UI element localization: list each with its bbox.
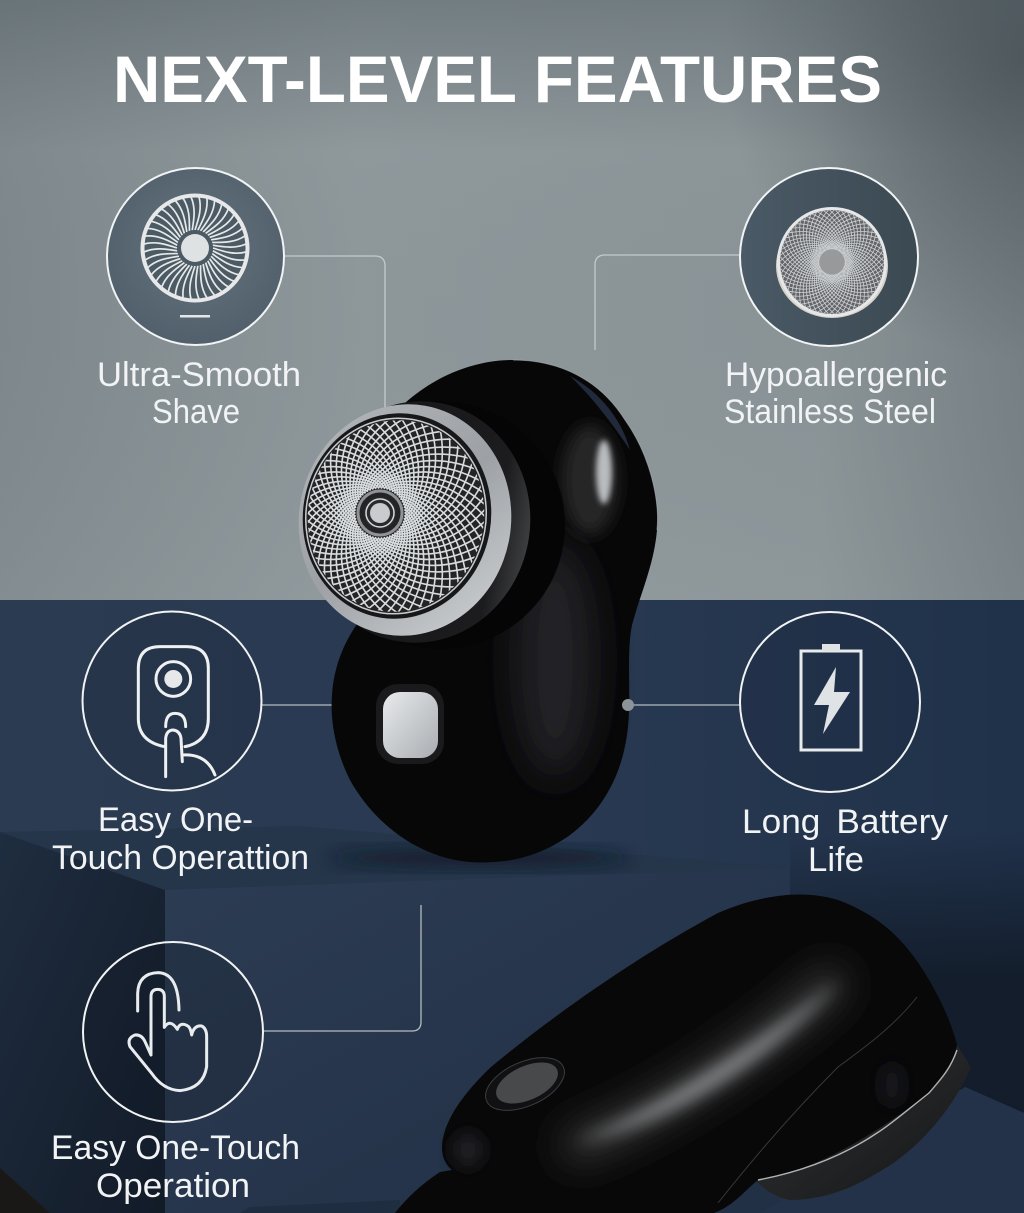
- background lower wall: [0, 600, 1024, 1213]
- label: [51, 1129, 300, 1205]
- label: [742, 803, 948, 879]
- body: [332, 360, 658, 862]
- label: [97, 356, 301, 431]
- pedestal: [0, 826, 1024, 1213]
- icon: battery: [740, 612, 920, 792]
- label: Hypoallergenic: [725, 356, 947, 394]
- highlights: [452, 975, 957, 1203]
- button: [478, 1047, 572, 1121]
- label: Stainless Steel: [724, 393, 936, 431]
- icon: pointing hand: [83, 942, 263, 1122]
- shaver secondary: [395, 894, 971, 1213]
- label: Easy One-: [98, 801, 253, 839]
- label: [52, 801, 309, 877]
- title: NEXT-LEVEL FEATURES: [113, 42, 882, 116]
- side indicator dot: [622, 699, 634, 711]
- highlights: [513, 360, 658, 780]
- feature: hypoallergenic stainless steel: [724, 168, 947, 431]
- label: Touch Operattion: [52, 839, 309, 877]
- background wall: [0, 0, 1024, 600]
- base: [755, 1045, 971, 1200]
- feature: ultra-smooth shave: [97, 168, 301, 431]
- icon: button with finger: [82, 612, 262, 790]
- label: Shave: [152, 393, 240, 431]
- feature: easy one-touch operation, button icon: [52, 612, 309, 877]
- label: Easy One-Touch: [51, 1129, 300, 1167]
- body: [395, 894, 957, 1213]
- label: Ultra-Smooth: [97, 356, 301, 394]
- power button: [376, 684, 444, 764]
- label: Long Battery: [742, 803, 948, 841]
- feature: long battery life: [740, 612, 948, 879]
- icon: steel mesh disc: [740, 168, 918, 346]
- label: [724, 356, 947, 431]
- shaver main: [298, 360, 658, 873]
- label: Life: [808, 841, 864, 879]
- label: Operation: [96, 1167, 250, 1205]
- connector lines: [262, 255, 741, 1031]
- shaver head: [298, 401, 565, 643]
- shadow: [330, 849, 630, 867]
- icon: fan blade disc: [107, 168, 284, 345]
- feature: easy one-touch operation, hand icon: [51, 942, 300, 1205]
